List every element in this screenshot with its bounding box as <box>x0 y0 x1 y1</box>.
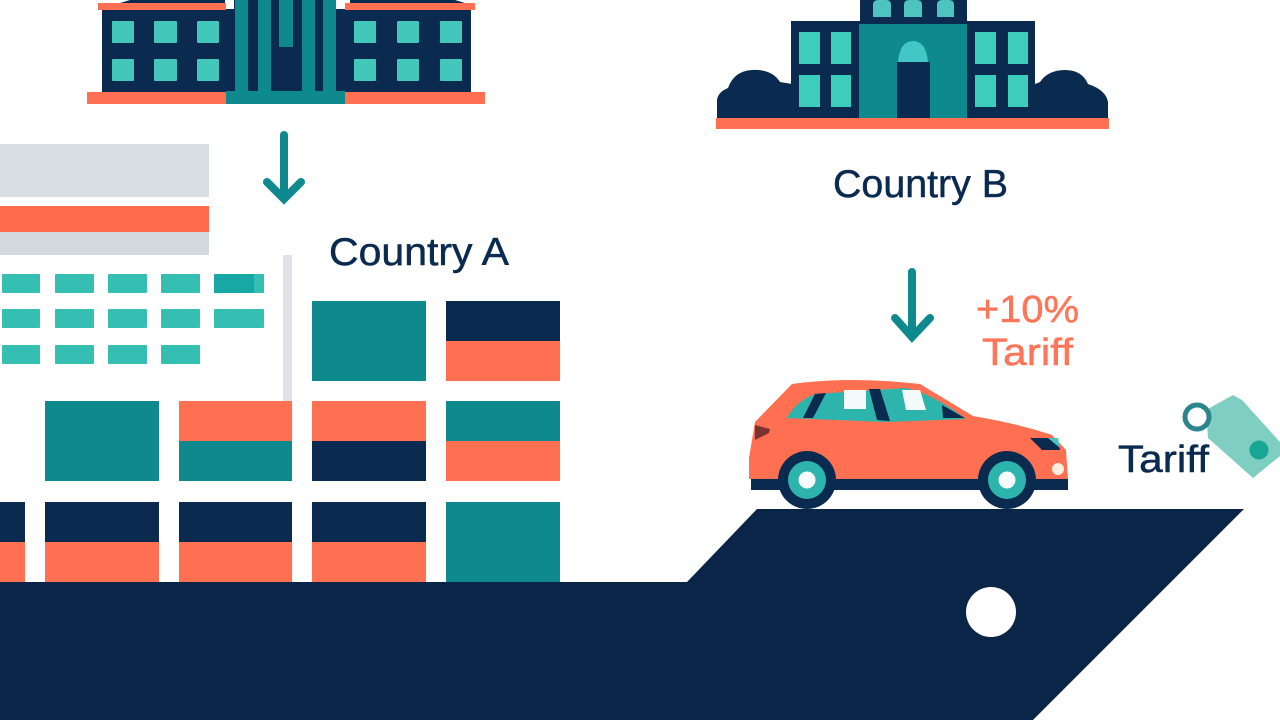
panel: ship bridge superstructure <box>0 144 292 401</box>
callout: +10% Tariff <box>976 289 1079 374</box>
arrow: from Country A building <box>267 135 301 199</box>
chart: stacked shipping containers <box>0 301 560 582</box>
icon: Country A government building <box>87 0 485 104</box>
ship hull <box>0 509 1244 720</box>
icon: price tag <box>1185 395 1280 478</box>
callout: +10% Tariff: +10% <box>976 289 1079 331</box>
callout: +10% Tariff: Tariff <box>982 332 1073 374</box>
icon: Country B government building <box>716 0 1109 129</box>
heading: Country B: Country B <box>833 163 1008 206</box>
heading: Country A: Country A <box>329 231 509 274</box>
arrow: from Country B building <box>895 272 930 337</box>
label: Tariff: Tariff <box>1118 439 1209 481</box>
icon: orange car <box>749 380 1068 509</box>
